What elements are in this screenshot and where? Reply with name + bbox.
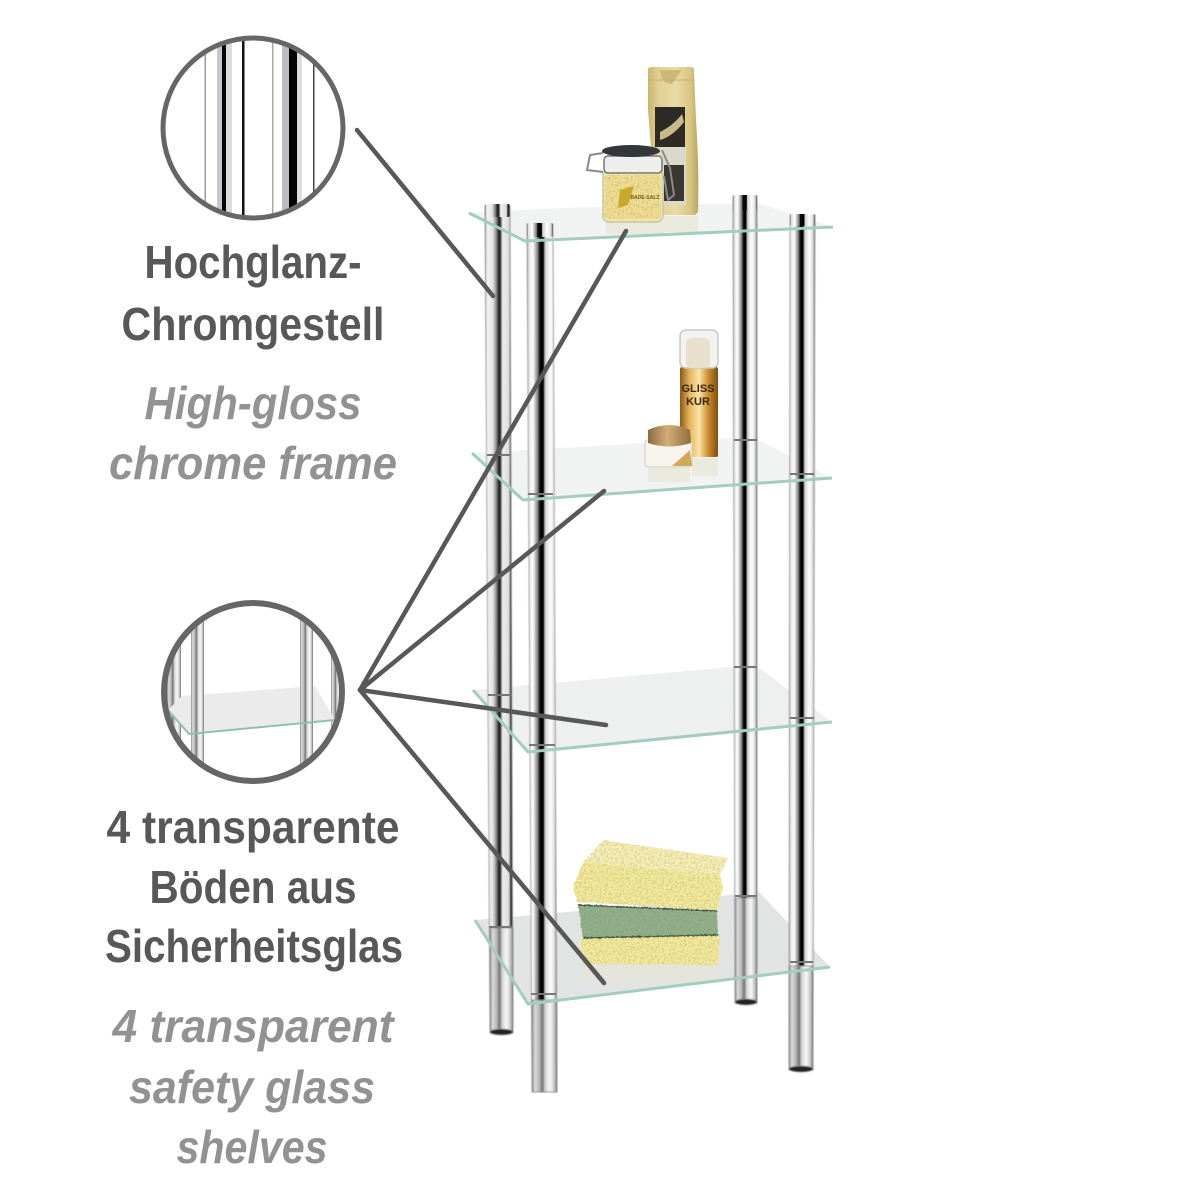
- product: bath salt jar: [587, 145, 674, 222]
- product: pump bottle: GLISS: [681, 383, 715, 395]
- text: glass shelves, German: 4 transparente: [106, 801, 400, 853]
- text: chrome frame, English: High-gloss: [144, 377, 362, 429]
- pole caps: [485, 195, 815, 237]
- product: shampoo bottle: [648, 67, 698, 215]
- text: glass shelves, English: shelves: [176, 1121, 328, 1173]
- text: chrome frame, German: [122, 236, 384, 350]
- text: glass shelves, German: [105, 801, 403, 972]
- glass shelf front edges: [469, 213, 833, 1004]
- glass shelf surfaces: [469, 203, 833, 1004]
- detail circle: chrome frame: [160, 35, 350, 225]
- shelf unit product photo: [469, 67, 833, 1092]
- detail circle: glass shelf: [160, 600, 350, 790]
- text: glass shelves, English: [112, 1000, 395, 1173]
- text: chrome frame, German: Hochglanz-: [144, 236, 362, 288]
- product: bath salt jar: BADE-SALZ: [631, 195, 659, 201]
- product reflections: [583, 216, 718, 980]
- text: chrome frame, English: [109, 377, 397, 489]
- callout leaders: glass shelves: [360, 231, 626, 983]
- product: pump bottle: KUR: [686, 396, 710, 408]
- product: cream jar: [645, 425, 692, 467]
- text: glass shelves, English: safety glass: [129, 1061, 375, 1113]
- text: glass shelves, English: 4 transparent: [112, 1000, 395, 1052]
- product: pump bottle: [680, 330, 718, 457]
- text: glass shelves, German: Böden aus: [150, 861, 356, 913]
- text: chrome frame, English: chrome frame: [109, 437, 397, 489]
- pole collars: [487, 440, 814, 994]
- product: towels: [573, 840, 728, 965]
- callout leader: chrome frame: [357, 130, 493, 296]
- text: glass shelves, German: Sicherheitsglas: [105, 920, 403, 972]
- text: chrome frame, German: Chromgestell: [122, 298, 384, 350]
- chrome poles: [485, 196, 815, 1092]
